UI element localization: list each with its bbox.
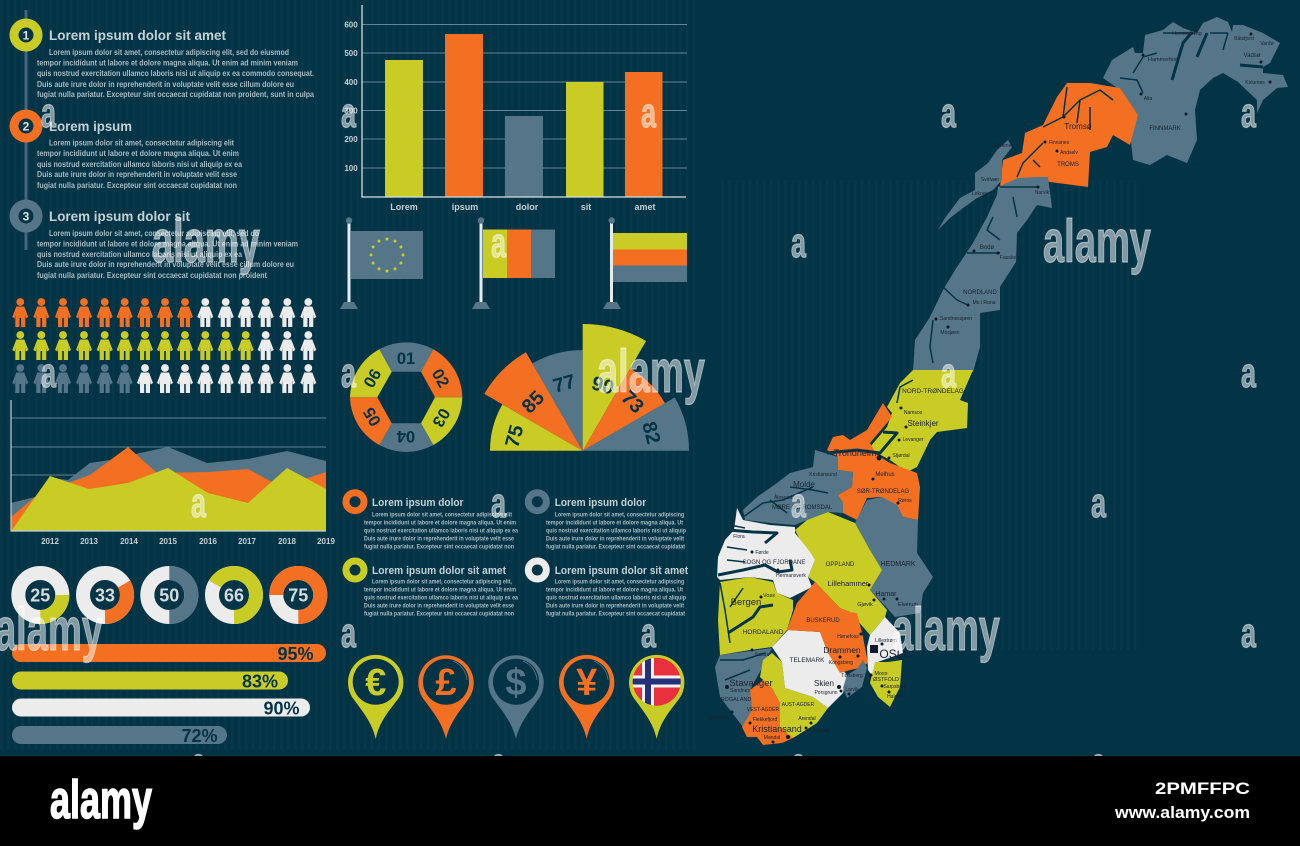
map labels: Lillestrøm <box>875 638 897 644</box>
map labels: Ålesund <box>774 494 792 501</box>
fan labels: 75 <box>501 423 528 450</box>
y axis labels: 600 <box>344 20 358 30</box>
body text: Duis aute irure dolor in reprehenderit in voluptate velit esse <box>364 536 514 542</box>
watermarks: a <box>1241 349 1256 396</box>
watermarks: a <box>641 609 656 656</box>
body text <box>546 512 686 550</box>
map labels: Arendal <box>798 716 816 722</box>
bar 95%: 95% <box>277 644 314 664</box>
watermarks: a <box>341 349 356 396</box>
ring <box>528 493 546 511</box>
watermarks: a <box>1091 479 1106 526</box>
map labels: Halden <box>887 694 903 700</box>
paragraph 2: Lorem ipsum dolor sit amet, consectetur adipiscing elit <box>49 138 234 148</box>
paragraph 1: quis nostrud exercitation ullamco laboris nisi ut aliquip ex ea commodo consequat. <box>37 68 314 78</box>
paragraph 3: Duis aute irure dolor in reprehenderit in voluptate velit esse cillum dolore eu <box>37 259 294 269</box>
watermarks: a <box>41 89 56 136</box>
watermarks: a <box>1241 89 1256 136</box>
watermarks: a <box>491 739 506 786</box>
map labels: Båtsfjord <box>1234 35 1254 42</box>
fan labels: 85 <box>518 387 549 418</box>
donut 75: 75 <box>288 586 308 606</box>
map labels: Moss <box>874 671 888 677</box>
paragraph 1: Duis aute irure dolor in reprehenderit in voluptate velit esse cillum dolore eu <box>37 79 294 89</box>
watermarks: a <box>191 479 206 526</box>
body text: fugiat nulla pariatur. Excepteur sint occaecat cupidatat non <box>364 544 514 550</box>
paragraph 3: tempor incididunt ut labore et dolore magna aliqua. Ut enim ad minim veniam <box>37 238 298 248</box>
footer url: www.alamy.com <box>1114 804 1250 822</box>
map labels: NORDLAND <box>963 290 998 296</box>
region: More og Romsdal <box>743 450 853 525</box>
region: Oppland <box>795 512 887 635</box>
y axis labels: 500 <box>344 49 358 58</box>
map labels: Drammen <box>823 645 861 655</box>
watermarks: alamy <box>0 596 103 663</box>
paragraph 3: Lorem ipsum dolor sit amet, consectetur adipiscing elit, sed do <box>49 228 259 238</box>
map labels: Tønsberg <box>841 673 863 679</box>
body text: Duis aute irure dolor in reprehenderit in voluptate velit <box>546 536 685 542</box>
paragraph 2: fugiat nulla pariatur. Excepteur sint occaecat cupidatat non <box>37 180 237 190</box>
map labels: NORD-TRØNDELAG <box>902 388 964 395</box>
map labels: BUSKERUD <box>806 618 840 624</box>
map pin: dollar <box>488 655 544 739</box>
paragraph 2: quis nostrud exercitation ullamco laboris nisi ut aliquip ex ea <box>37 159 242 169</box>
ring <box>528 561 546 579</box>
ring labels <box>360 350 453 445</box>
bar 83%: 83% <box>242 672 278 692</box>
map labels: Voss <box>763 593 775 599</box>
region: Vest-Agder <box>742 677 793 745</box>
body text: quis nostrud exercitation ullamco laboris nisi ut aliquip <box>546 528 686 534</box>
donut 75 <box>276 573 320 617</box>
body text: tempor incididunt ut labore et dolore magna aliqua. Ut <box>546 586 684 594</box>
map labels: Sandnessjøen <box>940 316 972 322</box>
area chart year labels: 2017 <box>238 537 256 546</box>
map labels: Levanger <box>903 437 924 443</box>
category labels: sit <box>581 202 591 212</box>
watermarks: a <box>791 739 806 786</box>
heading 3: Lorem ipsum dolor sit <box>49 208 190 224</box>
section 1: numbered text block <box>10 10 314 250</box>
body text: Lorem ipsum dolor sit amet, consectetur adipiscing <box>555 512 684 518</box>
badge 1 <box>10 18 42 52</box>
body text: fugiat nulla pariatur. Excepteur sint occaecat cupidatat <box>546 610 686 618</box>
map labels: HORDALAND <box>743 629 784 636</box>
badge 1: 1 <box>23 28 30 42</box>
fan labels <box>501 371 664 450</box>
paragraph 1: fugiat nulla pariatur. Excepteur sint occaecat cupidatat non proident, sunt in culpa <box>37 89 314 99</box>
category labels: amet <box>634 202 656 212</box>
map pin: euro: € <box>365 662 386 704</box>
category labels: dolor <box>516 202 539 212</box>
watermarks: alamy <box>597 338 705 405</box>
ring labels: 02 <box>428 366 453 391</box>
map labels: Svolvær <box>981 177 1000 183</box>
fan labels: 82 <box>637 419 664 447</box>
map labels: Alta <box>1144 96 1153 102</box>
badge 2: 2 <box>23 120 30 134</box>
donut percentage charts <box>18 573 320 617</box>
map pin: euro <box>348 655 403 739</box>
map labels: TROMS <box>1057 162 1079 168</box>
y axis labels: 200 <box>344 135 358 144</box>
map labels: Leknes <box>972 191 989 197</box>
donut 50 <box>147 573 191 617</box>
map labels: Melhus <box>875 472 895 478</box>
y axis labels: 300 <box>344 106 358 116</box>
map labels: Egersund <box>707 715 729 721</box>
region: Vestfold <box>843 660 867 698</box>
watermarks <box>0 89 1256 786</box>
body text: tempor incididunt ut labore et dolore magna aliqua. Ut enim <box>364 520 516 526</box>
body text <box>546 578 686 618</box>
legend block: yellow <box>346 561 518 618</box>
category labels: Lorem <box>390 202 418 212</box>
map labels: Vardø <box>1260 41 1274 47</box>
region: Troms <box>1000 83 1138 187</box>
watermarks: a <box>341 89 356 136</box>
region: Nord-Trondelag <box>870 370 973 472</box>
map labels: Sandnes <box>730 688 750 694</box>
body text: quis nostrud exercitation ullamco laboris nisi ut aliquip <box>546 594 686 602</box>
bar 90% <box>12 698 310 718</box>
fan labels: 90 <box>589 372 616 399</box>
body text: fugiat nulla pariatur. Excepteur sint occaecat cupidatat <box>546 544 686 550</box>
flag: vertical tricolour on pole <box>472 217 555 309</box>
body text: Lorem ipsum dolor sit amet, consectetur adipiscing elit, <box>372 578 512 586</box>
map labels: Stavanger <box>729 678 773 689</box>
watermarks: a <box>641 89 656 136</box>
region: Sor-Trondelag <box>827 403 920 520</box>
region: Nordland <box>913 177 1052 372</box>
donut 33: 33 <box>95 586 115 606</box>
ring labels: 04 <box>396 427 415 445</box>
map labels: Andenes <box>994 143 1014 149</box>
map labels: Gjøvik <box>857 602 873 608</box>
paragraph 3: fugiat nulla pariatur. Excepteur sint occaecat cupidatat non proident <box>37 270 267 280</box>
map pin: pound <box>418 655 474 739</box>
y axis labels: 400 <box>344 78 358 87</box>
bar 83% <box>12 672 288 692</box>
map labels: SØR-TRØNDELAG <box>857 489 910 495</box>
y axis labels <box>344 20 358 173</box>
city dots <box>725 32 1272 744</box>
flag: horizontal tricolour on pole <box>603 217 687 309</box>
map labels: Namsos <box>904 410 923 416</box>
map labels: Steinkjer <box>907 419 939 428</box>
map labels: VEST-AGDER <box>747 707 780 713</box>
ring labels: 03 <box>428 405 453 430</box>
map labels: Bodø <box>980 245 995 251</box>
donut 25: 25 <box>30 586 50 606</box>
ring <box>346 493 364 511</box>
watermarks: a <box>491 219 506 266</box>
map labels: Mo i Rana <box>973 300 996 306</box>
map labels: Hamar <box>875 591 897 598</box>
map labels: OPPLAND <box>826 562 855 568</box>
watermarks: a <box>791 219 806 266</box>
area chart year labels: 2018 <box>278 537 296 546</box>
map labels: Kristiansand <box>752 724 802 734</box>
region: Ostfold <box>870 660 902 707</box>
map labels: Skien <box>814 679 834 688</box>
paragraph 2 <box>37 138 242 190</box>
map labels: Andselv <box>1060 150 1078 156</box>
map labels: Hammerfest <box>1148 57 1178 63</box>
area chart year labels <box>41 537 335 546</box>
map labels: AUST-AGDER <box>782 702 815 708</box>
map labels: OSLO <box>879 647 913 661</box>
map labels: Narvik <box>1035 190 1050 196</box>
map labels: Molde <box>793 480 815 489</box>
map labels: Sauda <box>755 652 769 658</box>
paragraph 3 <box>37 228 298 280</box>
map labels: TELEMARK <box>789 657 825 664</box>
watermarks: a <box>941 349 956 396</box>
body text <box>364 512 518 550</box>
area chart year labels: 2012 <box>41 537 59 546</box>
map labels: FINNMARK <box>1149 126 1181 132</box>
map pin: yen <box>559 655 614 739</box>
map labels: ROGALAND <box>721 697 751 703</box>
map labels: Kirkenes <box>1245 80 1265 86</box>
map labels: Grimstad <box>809 728 829 734</box>
map labels: Mosjøen <box>940 330 960 336</box>
paragraph 1: tempor incididunt ut labore et dolore magna aliqua. Ut enim ad minim veniam <box>37 58 298 68</box>
body text <box>364 578 518 618</box>
heading 2: Lorem ipsum <box>49 118 132 134</box>
heading: Lorem ipsum dolor sit amet <box>372 565 506 577</box>
region: Sogn og Fjordane <box>717 508 815 598</box>
paragraph 2: tempor incididunt ut labore et dolore magna aliqua. Ut enim <box>37 148 239 158</box>
heading: Lorem ipsum dolor sit amet <box>555 565 689 577</box>
badge 2 <box>10 110 42 142</box>
map labels: Førde <box>755 550 769 556</box>
map labels: Kongsberg <box>829 660 853 666</box>
watermarks: a <box>941 89 956 136</box>
map labels: Honningsvåg <box>1172 30 1202 37</box>
map pin: pound: £ <box>435 662 457 704</box>
section 2: numbered text block <box>10 110 242 190</box>
bar chart <box>344 5 687 212</box>
hexagonal ring chart 01-06 <box>350 342 462 452</box>
area chart year labels: 2019 <box>317 537 335 546</box>
region: Telemark <box>772 630 847 708</box>
flag: EU on pole <box>340 217 423 309</box>
body text: tempor incididunt ut labore et dolore magna aliqua. Ut <box>546 520 684 526</box>
paragraph 1 <box>37 47 314 99</box>
map labels: Kristiansund <box>809 472 837 478</box>
map labels <box>707 30 1274 741</box>
area chart <box>11 400 335 546</box>
heading 1: Lorem ipsum dolor sit amet <box>49 27 226 43</box>
fan labels: 77 <box>551 371 578 398</box>
map labels: Vadsø <box>1244 53 1261 59</box>
donut 66: 66 <box>224 586 244 606</box>
EU stars <box>370 238 404 272</box>
map labels: Fauske <box>1000 255 1016 261</box>
region: Akershus and Oslo <box>867 617 903 677</box>
paragraph 1: Lorem ipsum dolor sit amet, consectetur adipiscing elit, sed do eiusmod <box>49 47 289 57</box>
map pin: dollar: $ <box>505 662 527 704</box>
watermarks: a <box>191 739 206 786</box>
footer logo: alamy <box>50 770 152 830</box>
map labels: Larvik <box>845 687 859 693</box>
badge 3: 3 <box>23 210 30 224</box>
watermarks: a <box>1241 609 1256 656</box>
region: Hordaland <box>718 577 793 655</box>
watermarks: a <box>1091 739 1106 786</box>
map labels: Hønefoss <box>837 634 859 640</box>
map labels: MØRE OG ROMSDAL <box>772 505 833 511</box>
heading: Lorem ipsum dolor <box>372 497 464 509</box>
map pin: Norway flag <box>629 655 684 739</box>
category labels: ipsum <box>452 202 478 212</box>
heading: Lorem ipsum dolor <box>555 497 647 509</box>
area chart year labels: 2015 <box>159 537 177 546</box>
map labels: Tromsø <box>1064 122 1092 131</box>
map labels: Flora <box>733 534 745 540</box>
badge 3 <box>10 200 42 232</box>
map labels: ØSTFOLD <box>873 677 899 683</box>
watermarks: a <box>41 349 56 396</box>
watermarks: a <box>491 479 506 526</box>
image id: 2PMFFPC <box>1155 780 1250 798</box>
fjords: fine <box>720 33 1228 680</box>
paragraph 3: quis nostrud exercitation ullamco laboris nisi ut aliquip ex ea <box>37 249 242 259</box>
map labels: Porsgrunn <box>814 690 838 696</box>
fan labels: 73 <box>617 387 648 418</box>
watermarks: alamy <box>1043 208 1151 275</box>
region: Aust-Agder <box>760 653 828 738</box>
map labels: Lillehammer <box>828 579 869 588</box>
map labels: Elverum <box>898 602 919 608</box>
pictogram: people rows <box>12 298 316 393</box>
polar fan chart <box>484 324 689 451</box>
region: Buskerud <box>787 582 868 673</box>
bar 90%: 90% <box>263 698 300 718</box>
map labels: Flekkefjord <box>753 717 777 723</box>
area chart year labels: 2016 <box>199 537 217 546</box>
islands: Lofoten and Vesteralen <box>938 140 1012 230</box>
body text: fugiat nulla pariatur. Excepteur sint occaecat cupidatat non <box>364 610 514 618</box>
watermarks: alamy <box>152 208 260 275</box>
map labels: Hermansverk <box>776 573 806 579</box>
map labels: Stjørdal <box>892 453 910 459</box>
body text: quis nostrud exercitation ullamco laboris nisi ut aliquip ex ea <box>364 594 518 602</box>
y axis labels: 100 <box>344 164 358 173</box>
body text: quis nostrud exercitation ullamco laboris nisi ut aliquip ex ea <box>364 528 518 534</box>
map labels: Bergen <box>731 597 761 608</box>
donut 33 <box>83 573 127 617</box>
region: Rogaland <box>715 648 772 727</box>
area chart year labels: 2014 <box>120 537 138 546</box>
donut 50: 50 <box>159 586 179 606</box>
progress bars <box>12 644 326 746</box>
map pin: yen: ¥ <box>576 662 597 704</box>
map labels: Røros <box>898 498 912 504</box>
ring labels: 06 <box>360 366 385 391</box>
body text: Lorem ipsum dolor sit amet, consectetur adipiscing elit <box>372 512 513 518</box>
watermarks: a <box>791 479 806 526</box>
legend block: orange <box>346 493 518 550</box>
map labels: SOGN OG FJORDANE <box>743 560 805 566</box>
ring labels: 05 <box>360 404 385 429</box>
donut 25 <box>18 573 62 617</box>
section 3: numbered text block <box>10 200 298 280</box>
watermarks: a <box>341 609 356 656</box>
region: Finnmark <box>1103 17 1288 165</box>
map labels: Finnsnes <box>1049 140 1070 146</box>
fjords: wide <box>718 32 1263 633</box>
map labels: Trondheim <box>834 448 876 458</box>
area chart year labels: 2013 <box>80 537 98 546</box>
bar 72%: 72% <box>181 726 218 746</box>
bar 95% <box>12 644 326 664</box>
map labels: Mandal <box>764 735 780 741</box>
donut 66 <box>212 573 256 617</box>
paragraph 2: Duis aute irure dolor in reprehenderit in voluptate velit esse <box>37 169 237 179</box>
legend block: grey <box>528 493 686 550</box>
legend block: white <box>528 561 689 618</box>
body text: tempor incididunt ut labore et dolore magna aliqua. Ut enim <box>364 586 516 594</box>
footer bar <box>0 756 1300 846</box>
body text: Duis aute irure dolor in reprehenderit in voluptate velit esse <box>364 602 514 610</box>
ring <box>346 561 364 579</box>
watermarks: alamy <box>892 596 1000 663</box>
category labels <box>390 202 656 212</box>
body text: Duis aute irure dolor in reprehenderit in voluptate velit <box>546 602 685 610</box>
bar 72% <box>12 726 227 746</box>
ring labels: 01 <box>397 350 415 368</box>
map of Norway <box>707 17 1288 745</box>
body text: Lorem ipsum dolor sit amet, consectetur adipiscing <box>555 578 684 586</box>
map labels: Sarpsborg <box>883 684 907 690</box>
map labels: HEDMARK <box>880 561 916 568</box>
region: Hedmark <box>855 497 933 617</box>
